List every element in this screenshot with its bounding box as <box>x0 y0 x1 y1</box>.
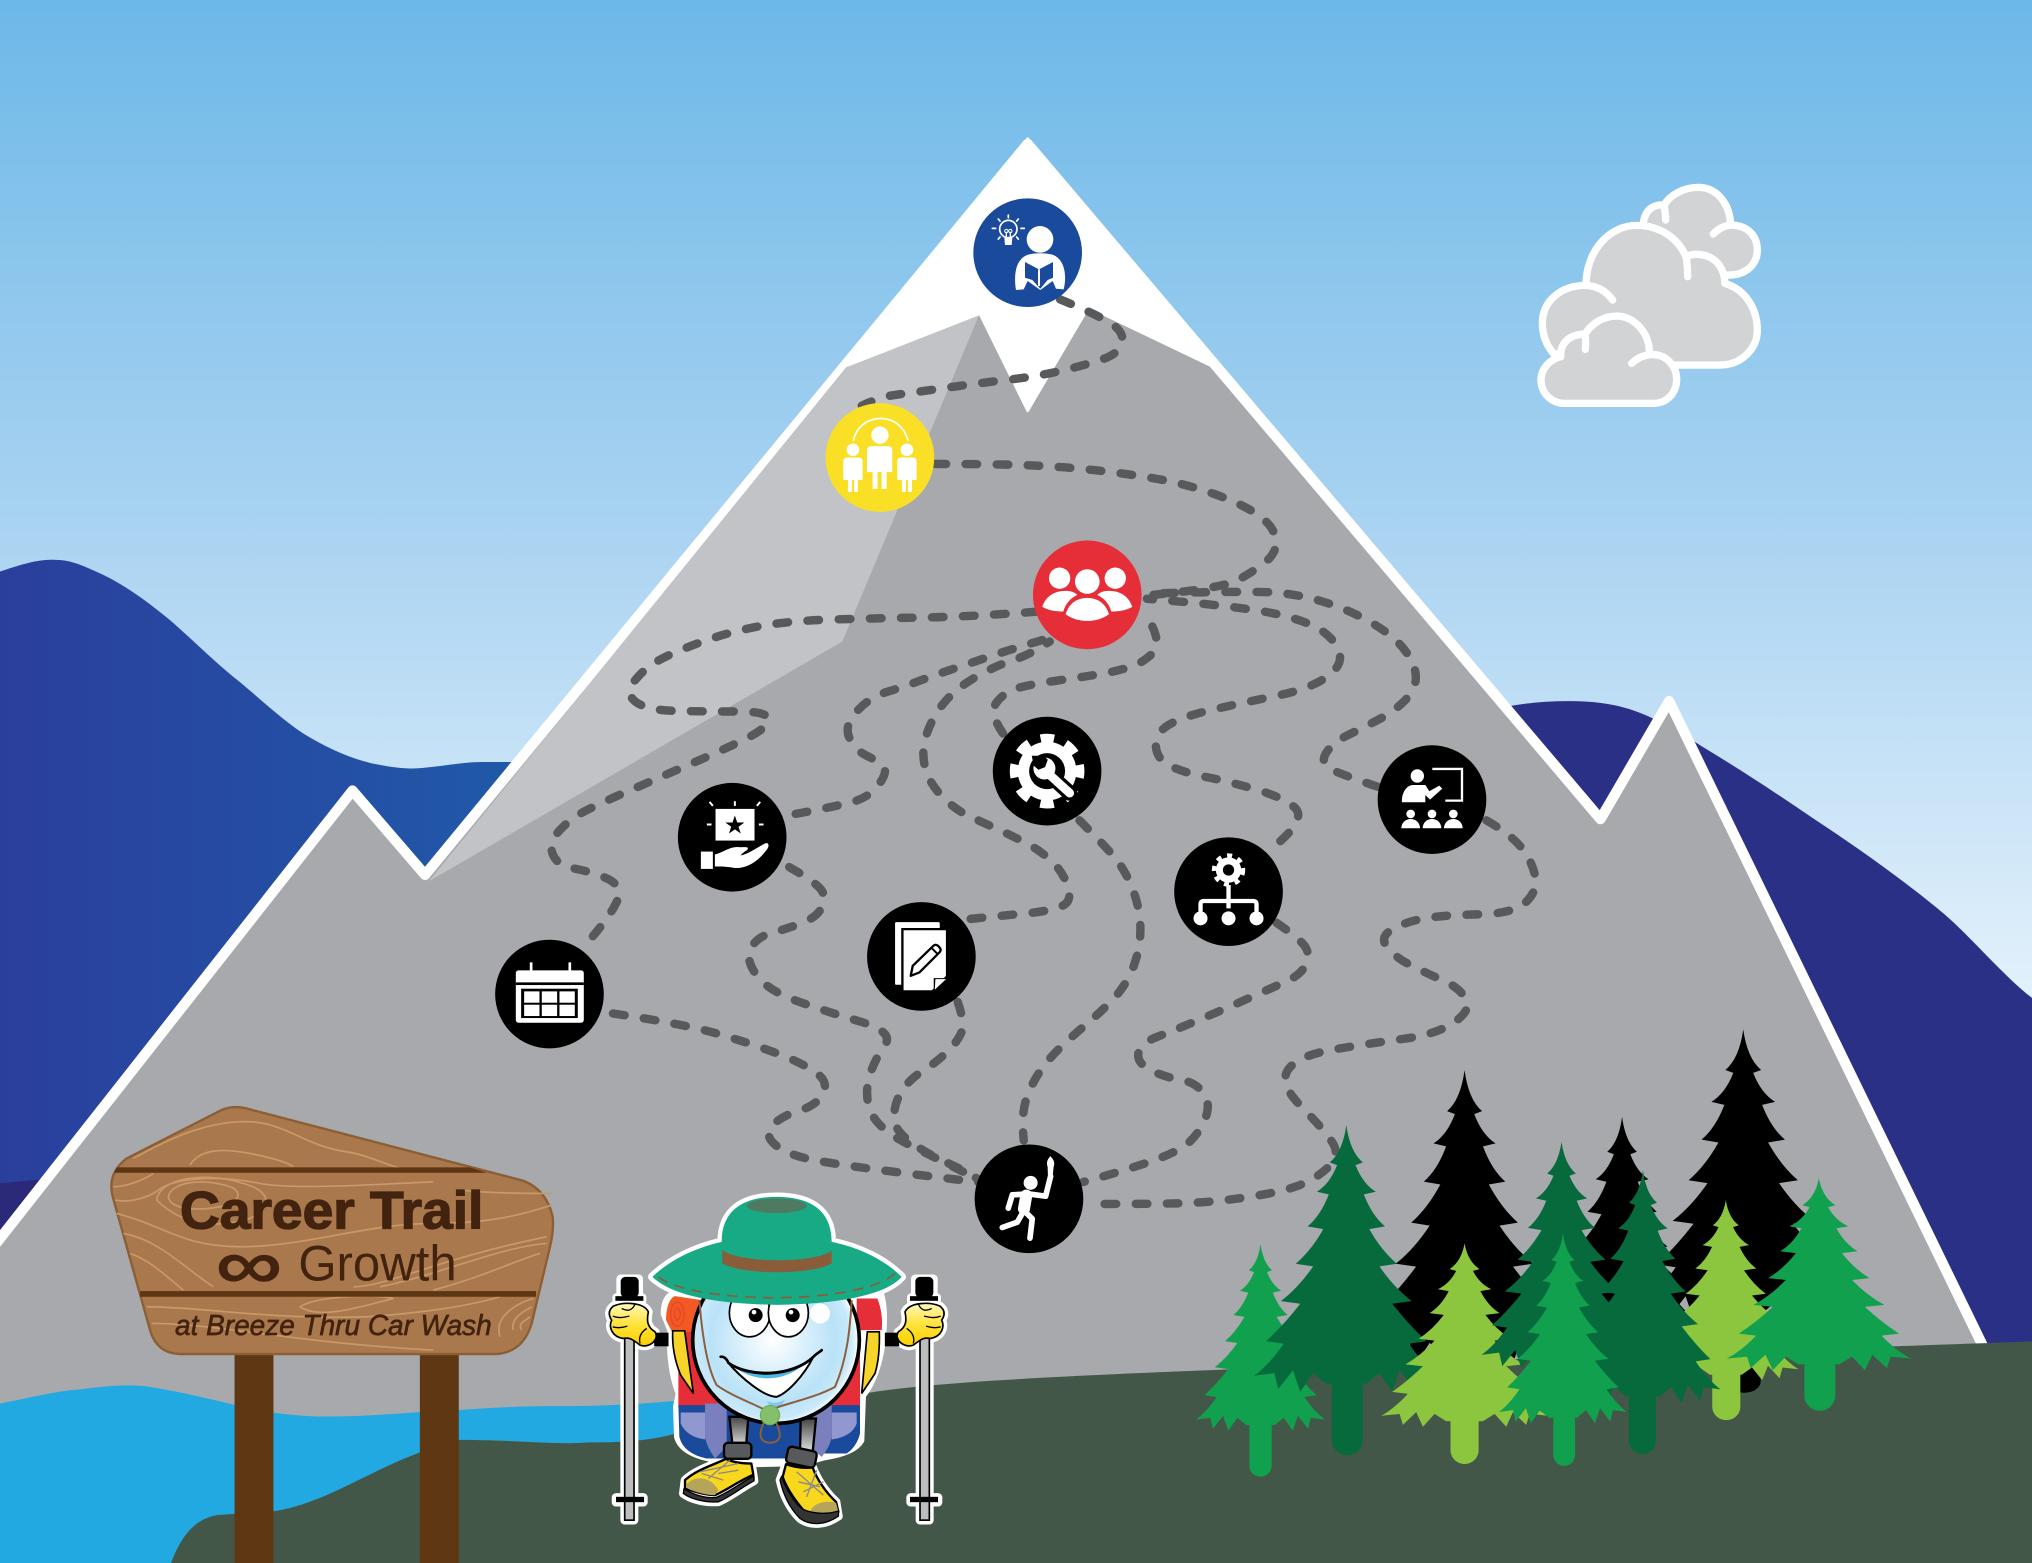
back cloud <box>1643 187 1757 275</box>
snow cap <box>848 139 1210 411</box>
lower bar <box>140 1291 536 1297</box>
icon: hierarchy with gear <box>1174 837 1283 946</box>
mountain light facet <box>429 314 980 881</box>
hiker mascot <box>609 1197 944 1524</box>
middle cloud <box>1542 225 1757 365</box>
wooden trail sign <box>111 1107 553 1563</box>
front cloud <box>1541 316 1677 403</box>
infinity symbol: ∞ <box>216 1228 282 1302</box>
sign title: Career Trail <box>180 1181 483 1240</box>
white sticker outline <box>609 1197 944 1524</box>
icon: person reading with light bulb (summit) <box>973 198 1082 307</box>
forest of pine trees <box>1196 1029 1911 1477</box>
cuff <box>701 852 713 869</box>
chin strap and bead <box>699 1300 852 1443</box>
green brim hat <box>652 1197 902 1305</box>
foreground ground <box>171 1341 2032 1563</box>
light bulb <box>992 215 1024 245</box>
right glove <box>886 1303 944 1346</box>
sign board <box>111 1107 553 1354</box>
sign location: at Breeze Thru Car Wash <box>175 1310 492 1342</box>
globe head <box>693 1257 859 1423</box>
icon: presenter teaching audience <box>1378 745 1486 854</box>
dark green middle tree <box>1565 1170 1720 1454</box>
small green tree <box>1196 1244 1325 1477</box>
left distant blue hill <box>0 560 518 1296</box>
cloud group <box>1541 187 1757 403</box>
award frame <box>716 809 755 841</box>
lime tree left <box>1381 1243 1548 1464</box>
green right tree <box>1727 1178 1911 1411</box>
icon: documents with pencil <box>867 902 976 1011</box>
gloves and poles <box>609 1277 944 1520</box>
black tree left <box>1368 1070 1562 1363</box>
icon: hand presenting star award <box>678 783 787 892</box>
wood grain <box>113 1122 552 1350</box>
tall dark green tree <box>1254 1125 1438 1455</box>
right boot <box>780 1464 839 1524</box>
lake <box>0 1385 726 1563</box>
arc over family <box>853 418 908 441</box>
sign subtitle: Growth <box>298 1236 457 1292</box>
orange bedroll <box>666 1296 702 1332</box>
icon: family group (yellow) <box>826 403 934 512</box>
left eye <box>729 1289 770 1337</box>
open hand <box>715 843 769 868</box>
right figure <box>897 457 917 492</box>
black tree right <box>1644 1029 1843 1393</box>
hat stitching <box>658 1273 895 1298</box>
left boot <box>683 1459 754 1502</box>
smiling mouth <box>721 1350 822 1408</box>
right pole <box>910 1277 938 1520</box>
backpack <box>666 1296 882 1458</box>
top bar <box>114 1167 487 1173</box>
sign post right <box>420 1348 459 1563</box>
hat crown top <box>747 1198 807 1213</box>
legs <box>724 1417 817 1468</box>
icon: runner with torch <box>975 1144 1083 1253</box>
icon: calendar <box>495 940 604 1048</box>
torch <box>1047 1156 1054 1177</box>
right eye <box>768 1289 808 1337</box>
dashed trail network <box>551 299 1536 1204</box>
black tree middle <box>1540 1117 1704 1367</box>
left figure <box>843 457 863 492</box>
hat band <box>722 1250 832 1272</box>
green front tree <box>1499 1233 1627 1466</box>
icon: gear and wrench <box>993 717 1101 825</box>
icon: team of three (red) <box>1033 541 1142 649</box>
right distant navy hill <box>1490 701 2032 1426</box>
dark green back tree <box>1482 1142 1641 1368</box>
reader figure <box>1015 226 1065 290</box>
left glove <box>609 1303 668 1346</box>
sign post left <box>235 1348 273 1563</box>
lime tree right <box>1653 1200 1799 1420</box>
left pole <box>615 1277 644 1520</box>
globe highlight <box>810 1303 830 1323</box>
centre figure <box>867 446 892 489</box>
